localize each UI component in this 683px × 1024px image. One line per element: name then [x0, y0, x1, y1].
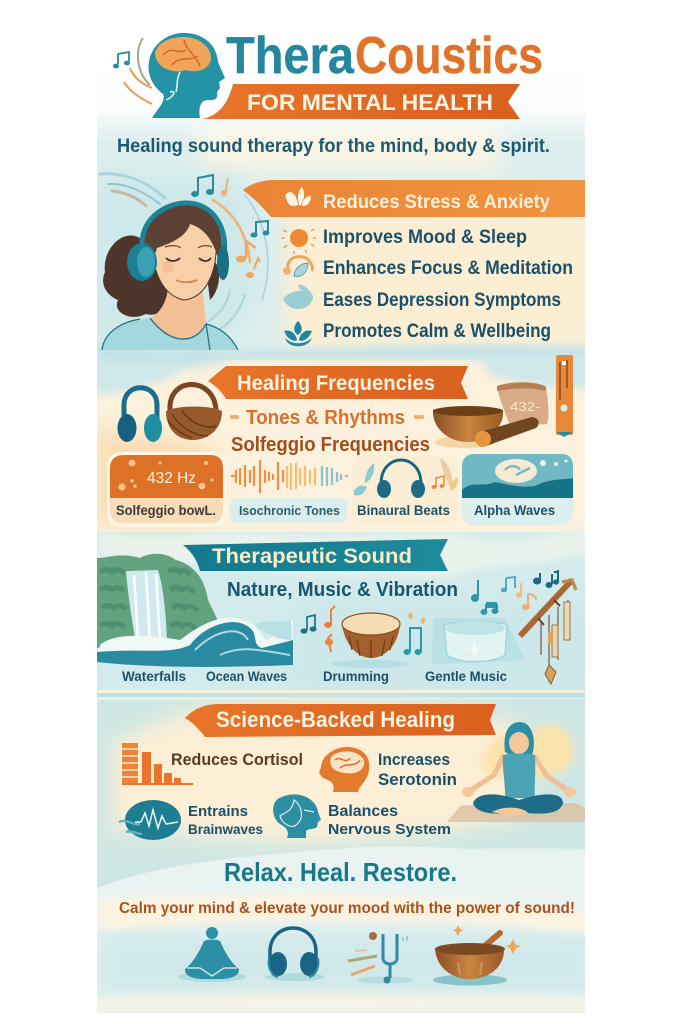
benefit: reduces cortisol: [122, 743, 303, 785]
illustration: meditating woman: [447, 722, 585, 822]
icon: woven basket: [166, 384, 222, 440]
benefit text: mood and sleep: Improves Mood & Sleep: [323, 227, 527, 248]
ribbon: science-backed healing: [185, 704, 496, 737]
closing headline: Relax. Heal. Restore.: [224, 857, 457, 887]
subtitle ribbon: [202, 84, 520, 119]
benefit: increases serotonin: Increases: [378, 750, 450, 769]
card: solfeggio bowl: [107, 452, 227, 527]
icon: sun: [281, 229, 316, 254]
icon: glass bowl for gentle music: [432, 618, 525, 664]
icon: lotus: [284, 321, 312, 346]
icon: singing bowl with pestle: [433, 925, 521, 986]
benefit text: focus and meditation: Enhances Focus & Meditation: [323, 258, 573, 279]
banner: reduces stress and anxiety: Reduces Stress & Anxiety: [323, 192, 550, 213]
caption: waterfalls: Waterfalls: [122, 669, 186, 684]
benefit text: depression: Eases Depression Symptoms: [323, 290, 561, 311]
logo: head with brain and music note: [113, 33, 225, 118]
title: [226, 27, 543, 85]
illustration: woman with headphones: [102, 203, 238, 350]
icon: focus arc and leaf: [283, 257, 312, 276]
benefit: increases serotonin: [319, 747, 457, 792]
icon: wind chime flute: [520, 580, 576, 684]
tagline: Healing sound therapy for the mind, body & spirit.: [117, 136, 550, 157]
benefit: balances nervous system: Nervous System: [328, 821, 451, 838]
caption: ocean waves: Ocean Waves: [206, 669, 287, 684]
benefit: balances nervous system: Balances: [328, 803, 398, 820]
benefit: entrains brainwaves: [119, 800, 263, 840]
benefit: increases serotonin: Serotonin: [378, 770, 457, 789]
title: Thera: [226, 27, 355, 85]
ribbon: healing frequencies: Healing Frequencies: [237, 372, 435, 395]
illustration: singing bowl, mallet and 432 device: [433, 355, 573, 448]
card: binaural beats: Binaural Beats: [357, 503, 450, 518]
icon: leaf: [283, 285, 313, 309]
card: binaural beats: [352, 455, 458, 525]
ribbon: therapeutic sound: Therapeutic Sound: [212, 545, 412, 568]
card: isochronic tones: Isochronic Tones: [239, 503, 340, 518]
subheading: nature music vibration: Nature, Music & Vibration: [227, 579, 458, 601]
subtitle ribbon: FOR MENTAL HEALTH: [247, 90, 493, 115]
benefit: reduces cortisol: Reduces Cortisol: [171, 750, 303, 769]
card: alpha waves: Alpha Waves: [474, 503, 555, 518]
frequency cards: [107, 452, 573, 527]
caption: gentle music: Gentle Music: [425, 669, 507, 684]
benefit: balances nervous system: [273, 794, 451, 838]
subheading: tones and rhythms: Tones & Rhythms: [246, 407, 405, 429]
benefit: entrains brainwaves: Brainwaves: [188, 821, 263, 837]
card: solfeggio bowl: 432 Hz: [147, 470, 196, 487]
benefit text: calm and wellbeing: Promotes Calm & Wellbeing: [323, 321, 551, 342]
illustration: waterfall and ocean wave: [97, 554, 293, 667]
card: isochronic tones: [230, 460, 348, 523]
illustration: singing bowl, mallet and 432 device: 432-: [510, 399, 540, 414]
background panel: [97, 112, 585, 1013]
icon group: floating notes: [471, 570, 559, 615]
ribbon: science-backed healing: Science-Backed Healing: [216, 707, 455, 732]
card: solfeggio bowl: Solfeggio bowL.: [116, 503, 216, 518]
title: Coustics: [355, 27, 543, 85]
icon group: music notes around the woman: [191, 175, 270, 278]
banner: reduces stress and anxiety: [243, 180, 585, 217]
icon: meditating figure: [178, 927, 246, 982]
icon group: drum with music notes: [300, 606, 425, 668]
icon: headphones: [118, 388, 162, 442]
closing message: Calm your mind & elevate your mood with the power of sound!: [119, 900, 575, 917]
captions: therapeutic sound: [122, 669, 507, 684]
benefits list: [281, 227, 573, 346]
benefit: entrains brainwaves: Entrains: [188, 804, 248, 820]
ribbon: healing frequencies: [208, 366, 468, 399]
subheading: solfeggio frequencies: Solfeggio Frequencies: [231, 434, 430, 456]
caption: drumming: Drumming: [323, 669, 389, 684]
ribbon: therapeutic sound: [183, 539, 448, 571]
sound swirl decoration: [100, 174, 268, 332]
icon: tuning fork: [348, 932, 413, 984]
card: alpha waves: [462, 454, 573, 525]
icon: large headphones: [265, 928, 325, 981]
